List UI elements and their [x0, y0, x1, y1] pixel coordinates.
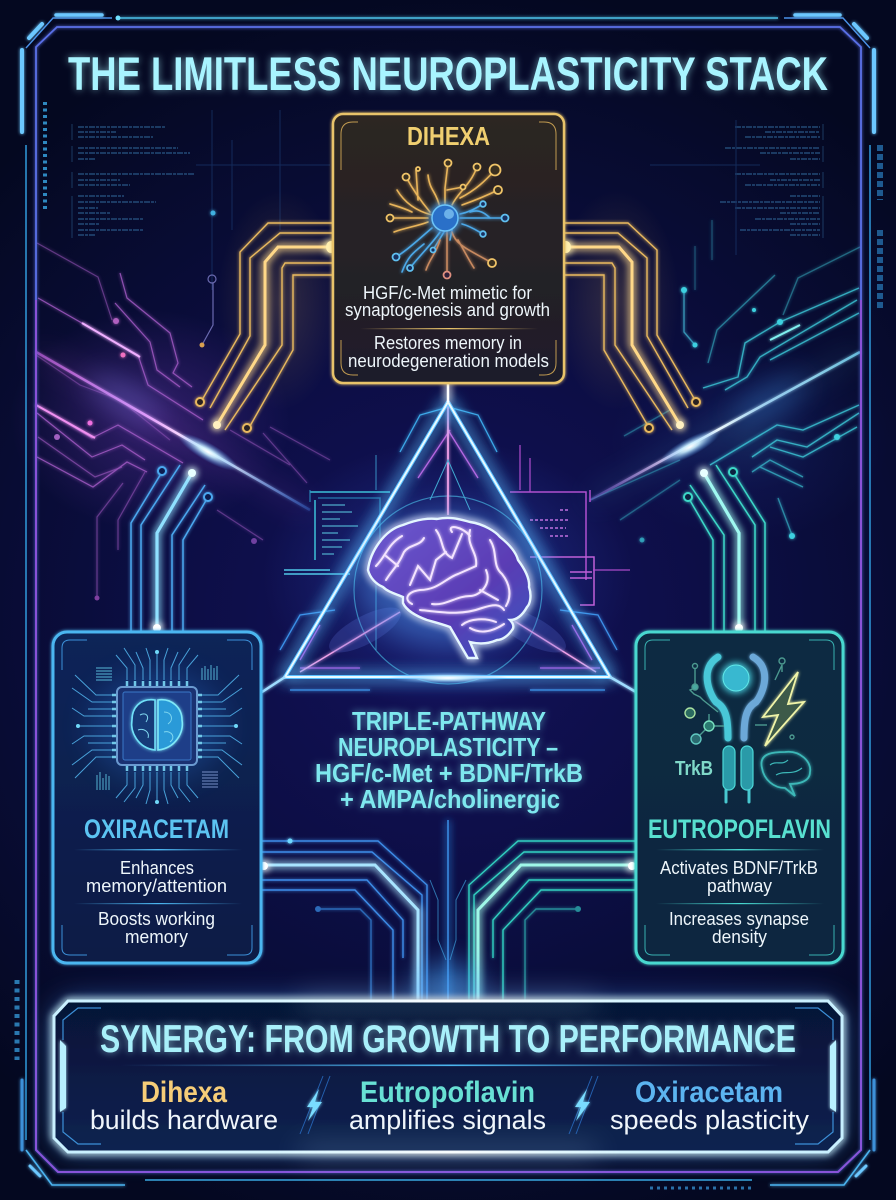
trace nodes left — [54, 275, 257, 600]
central triangle and brain — [262, 380, 636, 710]
panel: centre caption — [315, 706, 583, 814]
text: effect: neurodegeneration models — [348, 351, 549, 371]
panel: Eutropoflavin card — [636, 632, 843, 963]
icon: brain — [356, 512, 540, 658]
panel: Dihexa card — [333, 114, 564, 383]
item: Dihexa: Dihexa — [141, 1076, 227, 1109]
text: memory attention — [86, 858, 227, 896]
text: mechanism — [345, 283, 550, 320]
item: Oxiracetam — [610, 1076, 809, 1135]
gold circuits connecting Dihexa — [196, 190, 700, 432]
text: pathway: Activates BDNF/TrkB — [660, 858, 818, 878]
text: synapse density — [669, 909, 809, 947]
text: memory attention: memory/attention — [86, 876, 227, 896]
panel: centre caption: NEUROPLASTICITY – — [338, 732, 558, 762]
panel: centre caption: TRIPLE-PATHWAY — [352, 706, 546, 736]
blue circuits connecting Oxiracetam — [131, 465, 212, 632]
icon: TrkB receptor — [675, 657, 810, 802]
molecules — [685, 658, 794, 744]
dome circle behind brain — [354, 496, 542, 684]
heading: Eutropoflavin: EUTROPOFLAVIN — [648, 814, 831, 844]
text: pathway — [660, 858, 818, 896]
purple light beam left — [36, 323, 310, 510]
item: Eutropoflavin: amplifies signals — [349, 1105, 546, 1135]
text: pathway: pathway — [707, 876, 772, 896]
text: working memory: memory — [125, 927, 188, 947]
triangle outline — [285, 402, 610, 677]
icon: small brain — [761, 752, 810, 796]
icon: neuron — [386, 160, 508, 278]
text: synapse density: Increases synapse — [669, 909, 809, 929]
icon: lightning left — [300, 1076, 330, 1134]
panel: Oxiracetam card — [53, 632, 261, 963]
text: effect — [348, 333, 549, 371]
panel: centre caption: HGF/c-Met + BDNF/TrkB — [315, 758, 583, 788]
text: mechanism: synaptogenesis and growth — [345, 300, 550, 320]
text: memory attention: Enhances — [120, 858, 194, 878]
item: Eutropoflavin: Eutropoflavin — [360, 1076, 535, 1109]
panel: synergy — [54, 1001, 842, 1152]
pink inner lines — [300, 402, 596, 672]
icon: lightning — [763, 672, 804, 746]
text: synapse density: density — [712, 927, 767, 947]
connectors from side cards to centre — [260, 820, 636, 1007]
item: Oxiracetam: Oxiracetam — [635, 1076, 783, 1109]
heading: Dihexa: DIHEXA — [407, 121, 490, 151]
teal circuits connecting Eutropoflavin — [684, 465, 765, 632]
panel: centre caption: + AMPA/cholinergic — [340, 784, 560, 814]
text: mechanism: HGF/c-Met mimetic for — [363, 283, 532, 303]
text: working memory: Boosts working — [98, 909, 215, 929]
item: Oxiracetam: speeds plasticity — [610, 1105, 809, 1135]
item: Dihexa — [90, 1076, 278, 1135]
console screens behind the brain — [284, 445, 630, 650]
icon: circuit chip with brain — [72, 648, 242, 804]
text: working memory — [98, 909, 215, 947]
item: Eutropoflavin — [349, 1076, 546, 1135]
hex brackets — [280, 408, 617, 690]
decorative data readouts — [72, 110, 823, 290]
teal light beam right — [590, 325, 860, 500]
label: TrkB: TrkB — [675, 758, 713, 780]
background circuit traces: purple left — [36, 243, 330, 597]
icon: lightning right — [569, 1076, 598, 1134]
background circuit traces: teal right — [590, 220, 860, 535]
item: Dihexa: builds hardware — [90, 1105, 278, 1135]
trace nodes right — [640, 287, 840, 542]
heading: Oxiracetam: OXIRACETAM — [84, 814, 229, 844]
text: effect: Restores memory in — [374, 333, 522, 353]
